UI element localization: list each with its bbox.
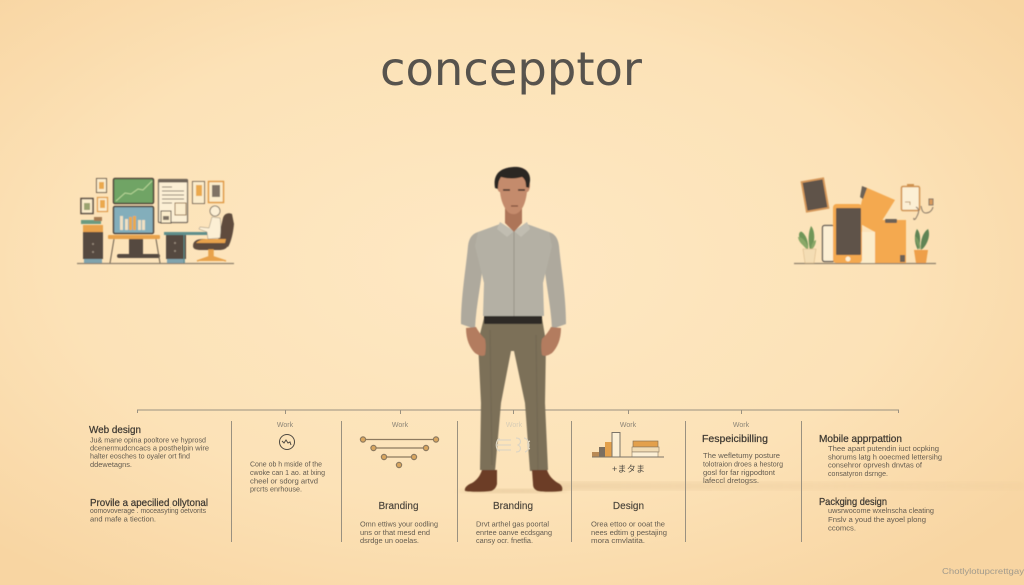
icon: circle face [280, 434, 294, 450]
text block [360, 522, 438, 545]
person figure [458, 167, 568, 493]
text block: nees edtim g pestajing [591, 530, 667, 537]
heading: design: Design [613, 501, 644, 512]
shelf line [794, 262, 936, 264]
text block [476, 522, 552, 545]
text block: specialised [90, 508, 206, 524]
text block: web design [90, 438, 209, 469]
large phone [833, 204, 862, 263]
panel: fespecibilling [702, 422, 783, 485]
title: concepptor [380, 42, 642, 96]
neck and face [505, 205, 522, 232]
text block [703, 453, 783, 485]
heading: branding: Branding [378, 501, 419, 512]
heading: specialised: Provile a apecilied ollytonal [90, 497, 208, 509]
text block: web design: ddewetagns. [90, 462, 132, 469]
text block: mobile: shorums latg h ooecmed lettersihg [828, 454, 942, 462]
illustration: mobile and packaging [794, 178, 936, 264]
text block: mobile [828, 446, 942, 478]
shoes [465, 470, 562, 492]
text block: Omn ettiws your oodling [360, 522, 438, 528]
text block: mobile: consatyron dsrnge. [828, 471, 888, 478]
text block: mora cmvlatita. [591, 538, 645, 545]
text block: web design: halter eosches to oyaler ort find [90, 454, 190, 460]
icon: linked loops [496, 438, 530, 452]
desk floor line [77, 262, 234, 264]
orange clipboard box [875, 219, 906, 263]
orange tilted folder [857, 186, 895, 232]
text block: cwoke can 1 ao. at lxing [250, 470, 325, 477]
heading: Fespeicibilling [702, 433, 768, 445]
text block: cheel or sdorg artvd [250, 478, 318, 486]
text block [591, 522, 667, 545]
text block: Orea ettoo or ooat the [591, 522, 665, 528]
text block: The wefletumy posture [703, 453, 780, 460]
illustration: design workspace [77, 178, 234, 264]
work label: Work [277, 422, 294, 429]
text block: packaging: ccomcs. [828, 526, 856, 532]
right cabinet and side desk [164, 232, 216, 263]
desk and stand [108, 235, 160, 263]
text block: packaging: uwsrwocome wxelnscha cleating [828, 508, 934, 515]
heading: web design: Web design [89, 424, 141, 436]
text block: uns or that mesd end [360, 530, 430, 537]
hands [466, 327, 486, 356]
right potted plant [914, 229, 929, 263]
text block: packaging: Fnslv a youd the ayoel plong [828, 517, 926, 524]
torso shirt [475, 224, 552, 316]
shoe shadow [458, 489, 568, 493]
text block: web design: dcenermudcncacs a posthelpin wire [90, 446, 209, 452]
panel: work column 1 [250, 422, 325, 494]
left potted plant [798, 226, 816, 263]
panel: mobile and packaging [819, 433, 942, 532]
text block: gosl for far rigpodtont [703, 470, 775, 477]
text block: enrtee oanve ecdsgang [476, 530, 552, 537]
tilted picture frame [802, 178, 828, 212]
heading: packaging: Packging design [819, 496, 887, 508]
hair [495, 167, 530, 189]
text block: Cone ob h mside of the [250, 462, 322, 468]
text block: cansy ocr. fnetfia. [476, 538, 533, 545]
text block: specialised: oomovoverage . moceasyting oetvorits [90, 508, 206, 515]
work label: Work [506, 422, 523, 429]
footer credit: Chotlylotupcrettgay [942, 566, 1024, 576]
bar chart monitor [114, 206, 154, 234]
column dividers [232, 421, 802, 542]
text block: dsrdge un ooelas. [360, 538, 419, 545]
cream paper [861, 232, 875, 263]
work label: Work [620, 422, 637, 429]
text block: tolotraion droes a hestorg [703, 462, 783, 468]
work label: Work [392, 422, 409, 429]
arms [461, 232, 484, 329]
green chart monitor [114, 178, 154, 204]
seated figure and chair [193, 206, 234, 261]
work label: Work [733, 422, 750, 429]
text block: mobile: Thee apart putendin iuct ocpking [828, 446, 939, 453]
text block: packaging [828, 508, 934, 532]
text block: web design: Ju& mane opina pooltore ve hyprosd [90, 438, 206, 444]
panel: web design [89, 424, 209, 524]
text block: prcrts enrhouse. [250, 486, 302, 494]
panel: design [591, 422, 667, 545]
text block: mobile: consehror oprvesh dnvtas of [828, 462, 922, 470]
icon: node network [360, 437, 439, 468]
panel: branding two [476, 422, 552, 545]
icon: bars and stacked books [592, 432, 664, 457]
text block: Drvt arthel gas poortal [476, 522, 549, 528]
panel: branding one [360, 422, 439, 545]
belt [484, 315, 542, 324]
trousers [478, 318, 548, 471]
heading: branding: Branding [493, 501, 533, 512]
heading: mobile: Mobile apprpattion [819, 433, 902, 445]
hanging clipboard [902, 184, 920, 210]
text block [250, 462, 325, 494]
stethoscope cable [914, 199, 933, 220]
wall pictures [81, 178, 224, 214]
text block: specialised: and mafe a tiection. [90, 516, 156, 524]
text block: lafeccl dretogss. [703, 478, 759, 485]
small phone [822, 226, 834, 262]
icon row: + ま タ ま [612, 464, 645, 474]
left cabinet with books [81, 217, 103, 263]
document sheet [158, 180, 188, 223]
timeline connector [138, 410, 898, 414]
